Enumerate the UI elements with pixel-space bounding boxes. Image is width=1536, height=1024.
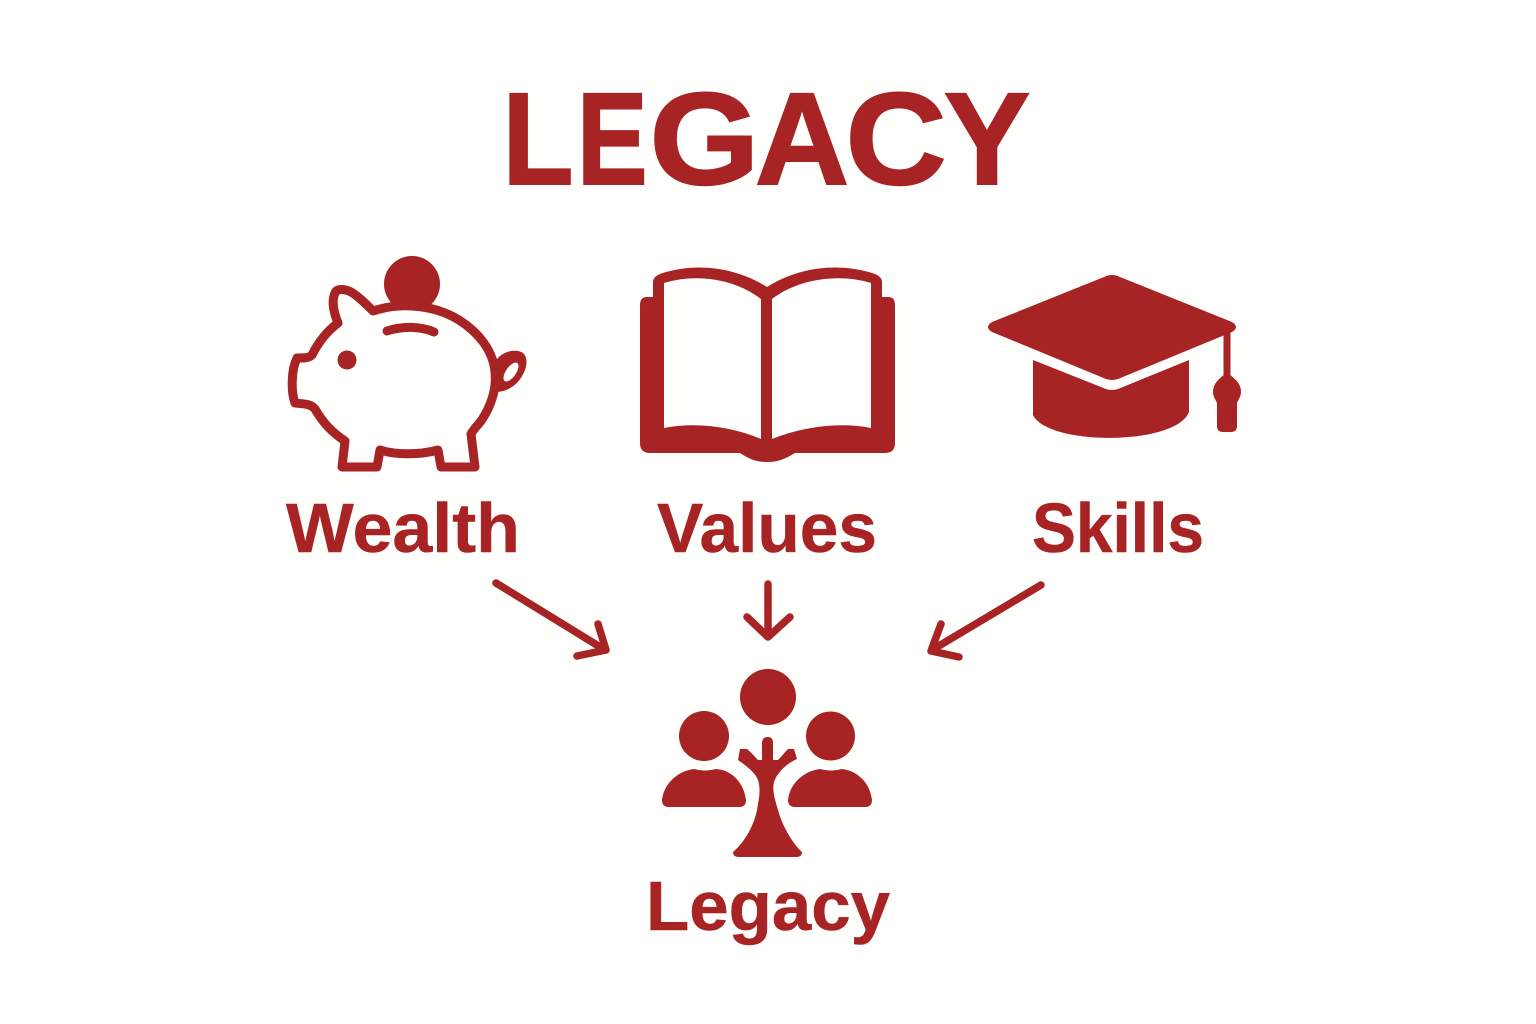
icon: open book [640, 268, 895, 462]
icon: graduation cap [988, 275, 1241, 438]
title: G [650, 65, 760, 212]
label: Wealth: Wealth [286, 489, 520, 567]
title: A [755, 65, 849, 212]
label: Legacy: Legacy [646, 867, 890, 945]
label: Skills: Skills [1032, 489, 1204, 567]
title: E [577, 65, 648, 212]
title: Y [944, 65, 1030, 212]
label: Values: Values [657, 489, 877, 567]
arrow: skills to legacy [931, 585, 1041, 657]
arrow: values to legacy [747, 584, 790, 637]
icon: piggy bank [292, 256, 527, 467]
icon: family tree [662, 669, 872, 857]
arrow: wealth to legacy [496, 583, 606, 656]
title: C [846, 65, 946, 212]
title: L [502, 65, 574, 212]
